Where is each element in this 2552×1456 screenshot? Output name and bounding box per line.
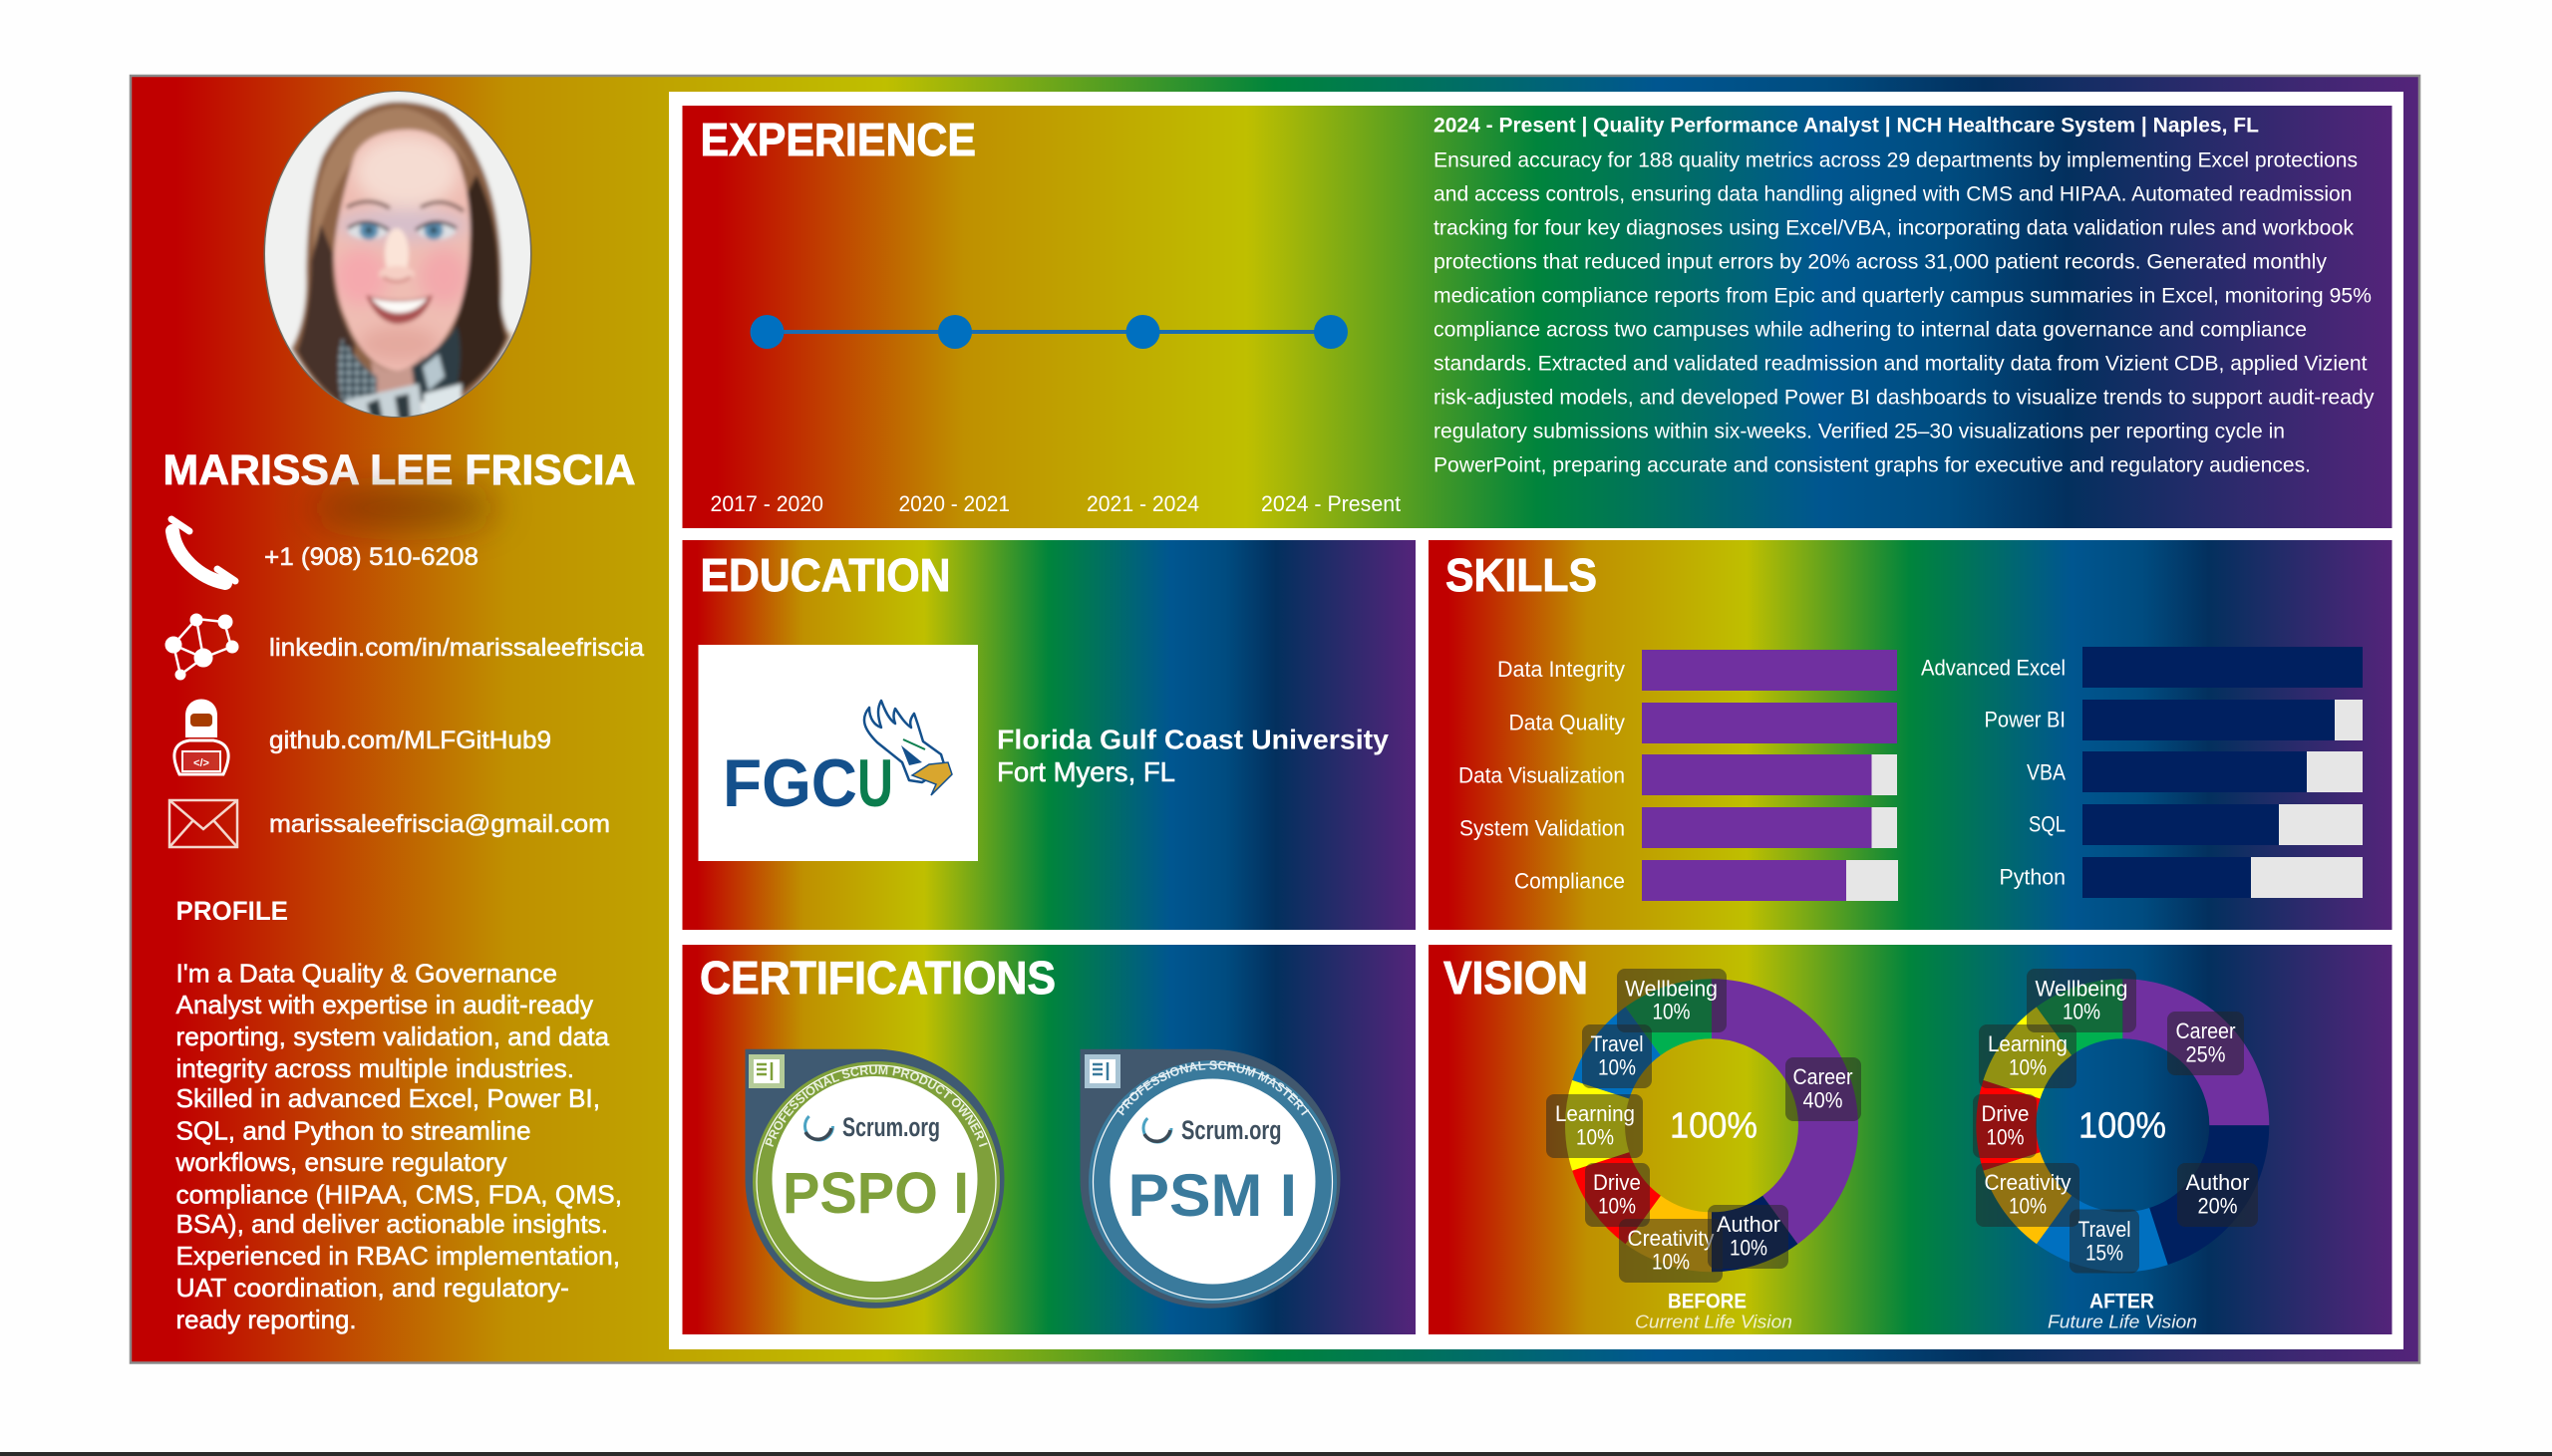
badge: PSM I: PROFESSIONAL SCRUM MASTER I	[1116, 1060, 1310, 1116]
timeline: 2024 - Present	[1261, 491, 1401, 516]
badge: PSM I: Scrum.org	[1181, 1115, 1282, 1145]
caption: before: BEFORE	[1668, 1291, 1747, 1313]
panel: education	[682, 540, 1416, 930]
profile text: compliance (HIPAA, CMS, FDA, QMS,	[175, 1180, 622, 1210]
education heading: EDUCATION	[700, 549, 951, 601]
bar chart: tools: Python	[2000, 865, 2066, 890]
donut labels: before: 10%	[1598, 1055, 1636, 1080]
donut labels: after: 10%	[2009, 1194, 2047, 1219]
donut labels: before	[1546, 969, 1861, 1283]
outer rainbow frame	[131, 76, 2419, 1363]
bar chart: tools: VBA	[2027, 760, 2066, 785]
donut labels: after: 20%	[2197, 1194, 2237, 1219]
portrait photo	[259, 85, 538, 424]
experience description: 2024 - Present | Quality Performance Analyst | NCH Healthcare System | Naples, FL	[1434, 114, 2259, 138]
donut labels: before: 10%	[1652, 1250, 1690, 1275]
donut labels: before: Creativity	[1627, 1226, 1715, 1251]
github link: github.com/MLFGitHub9	[269, 727, 551, 754]
badge: PSPO I: Scrum.org	[842, 1112, 940, 1142]
badge: PSPO I: PSPO I	[783, 1161, 969, 1226]
caption: before: Current Life Vision	[1635, 1312, 1792, 1332]
caption: after: Future Life Vision	[2048, 1312, 2197, 1332]
experience description: regulatory submissions within six-weeks. Verified 25–30 visualizations per reporting cycle in	[1434, 419, 2285, 442]
bar chart: data skills: System Validation	[1459, 816, 1625, 841]
profile text: UAT coordination, and regulatory-	[175, 1273, 569, 1303]
badge: PSM I: PSM I	[1128, 1162, 1297, 1229]
donut labels: after: Author	[2185, 1170, 2249, 1195]
experience description: Ensured accuracy for 188 quality metrics across 29 departments by implementing Excel protections	[1434, 147, 2358, 171]
donut labels: before: 10%	[1653, 1000, 1691, 1024]
badge: PSPO I: PROFESSIONAL SCRUM PRODUCT OWNER I	[765, 1065, 988, 1147]
caption: before	[1635, 1291, 1792, 1332]
experience description	[1434, 114, 2375, 476]
university location: Fort Myers, FL	[997, 756, 1175, 787]
FGCU logo	[698, 645, 978, 861]
experience heading: EXPERIENCE	[700, 114, 976, 165]
FGCU logo: FGC	[723, 745, 857, 821]
phone number: +1 (908) 510-6208	[264, 543, 478, 571]
experience description: compliance across two campuses while adhering to internal data governance and compliance	[1434, 317, 2307, 341]
donut labels: before: Travel	[1591, 1031, 1643, 1056]
donut chart: after	[2006, 1009, 2239, 1242]
donut labels: after: 10%	[2009, 1055, 2047, 1080]
timeline: 2017 - 2020	[710, 491, 823, 516]
linkedin link: linkedin.com/in/marissaleefriscia	[269, 634, 644, 662]
profile text: Analyst with expertise in audit-ready	[175, 990, 593, 1019]
icon: envelope	[169, 800, 237, 847]
donut chart: before	[1595, 1009, 1828, 1242]
profile text: I'm a Data Quality & Governance	[175, 959, 557, 989]
profile heading: PROFILE	[175, 896, 288, 926]
panel: certifications	[682, 945, 1416, 1334]
bar chart: tools: SQL	[2029, 812, 2066, 837]
bar chart: data skills: Data Integrity	[1497, 657, 1625, 682]
icon: developer	[174, 700, 228, 774]
donut labels: after: Wellbeing	[2036, 976, 2127, 1001]
panel: skills	[1429, 540, 2392, 930]
name: MARISSA LEE FRISCIA	[163, 446, 636, 494]
bar chart: data skills: Compliance	[1514, 869, 1625, 894]
donut labels: before: Wellbeing	[1625, 976, 1718, 1001]
experience description: and access controls, ensuring data handling aligned with CMS and HIPAA. Automated readmission	[1434, 181, 2353, 205]
donut labels: after: Creativity	[1984, 1170, 2072, 1195]
email link: marissaleefriscia@gmail.com	[269, 810, 610, 838]
donut labels: before: 40%	[1802, 1088, 1842, 1113]
timeline	[710, 315, 1401, 516]
donut labels: before: Career	[1792, 1064, 1852, 1089]
icon: phone	[171, 519, 235, 583]
profile text	[174, 959, 622, 1334]
donut labels: after: Travel	[2077, 1217, 2131, 1242]
white content area	[669, 92, 2403, 1349]
certifications heading: CERTIFICATIONS	[700, 952, 1056, 1004]
donut labels: before: Learning	[1555, 1101, 1635, 1126]
name shadow	[309, 488, 498, 528]
donut labels: after: 10%	[1986, 1125, 2024, 1150]
experience description: PowerPoint, preparing accurate and consistent graphs for executive and regulatory audiences.	[1434, 452, 2311, 476]
profile text: ready reporting.	[175, 1305, 357, 1334]
donut center: after: 100%	[2078, 1105, 2166, 1146]
icon: network	[165, 614, 238, 680]
donut labels: before: Drive	[1593, 1170, 1641, 1195]
donut labels: before: Author	[1717, 1212, 1780, 1237]
bar chart: data skills: Data Visualization	[1458, 763, 1625, 788]
donut labels: after: Learning	[1988, 1031, 2068, 1056]
donut labels: after	[1973, 969, 2258, 1274]
university name: Florida Gulf Coast University	[997, 725, 1389, 755]
donut labels: before: 10%	[1598, 1194, 1636, 1219]
bar chart: tools: Power BI	[1984, 708, 2066, 732]
panel: experience	[682, 106, 2392, 528]
FGCU logo: U	[857, 745, 893, 821]
caption: after	[2048, 1291, 2197, 1332]
panel: sidebar	[163, 85, 644, 1334]
bottom dark bar	[0, 1452, 2552, 1456]
bar chart: tools: Advanced Excel	[1921, 656, 2066, 681]
profile text: SQL, and Python to streamline	[175, 1116, 530, 1146]
icon: developer: </>	[193, 757, 209, 769]
vision heading: VISION	[1443, 952, 1588, 1004]
bar chart: data skills: Data Quality	[1509, 711, 1625, 735]
timeline: 2021 - 2024	[1087, 491, 1199, 516]
experience description: medication compliance reports from Epic and quarterly campus summaries in Excel, monitoring 95%	[1434, 283, 2372, 307]
skills heading: SKILLS	[1445, 549, 1597, 601]
badge: PSM I	[1081, 1048, 1340, 1309]
profile text: Experienced in RBAC implementation,	[175, 1241, 620, 1271]
donut labels: before: 10%	[1576, 1125, 1614, 1150]
experience description: risk-adjusted models, and developed Power BI dashboards to visualize trends to support audit-ready	[1434, 385, 2375, 409]
profile text: Skilled in advanced Excel, Power BI,	[175, 1083, 600, 1113]
bar chart: data skills	[1458, 650, 1898, 901]
caption: after: AFTER	[2089, 1291, 2154, 1313]
profile text: integrity across multiple industries.	[175, 1053, 574, 1083]
donut labels: before: 10%	[1730, 1236, 1767, 1261]
donut labels: after: Career	[2175, 1019, 2235, 1043]
donut labels: after: 10%	[2063, 1000, 2100, 1024]
timeline: 2020 - 2021	[899, 491, 1010, 516]
donut center: before: 100%	[1670, 1105, 1757, 1146]
panel: vision	[1429, 945, 2392, 1334]
experience description: tracking for four key diagnoses using Excel/VBA, incorporating data validation rules and workbook	[1434, 215, 2354, 239]
bar chart: tools	[1921, 647, 2363, 898]
donut labels: after: 15%	[2085, 1240, 2123, 1266]
experience description: standards. Extracted and validated readmission and mortality data from Vizient CDB, applied Vizient	[1434, 351, 2368, 375]
donut labels: after: 25%	[2185, 1042, 2225, 1067]
badge: PSPO I	[746, 1048, 1005, 1309]
profile text: BSA), and deliver actionable insights.	[175, 1209, 608, 1239]
experience description: protections that reduced input errors by 20% across 31,000 patient records. Generated monthly	[1434, 249, 2327, 273]
donut labels: after: Drive	[1982, 1101, 2030, 1126]
profile text: workflows, ensure regulatory	[174, 1147, 506, 1177]
profile text: reporting, system validation, and data	[175, 1021, 610, 1051]
